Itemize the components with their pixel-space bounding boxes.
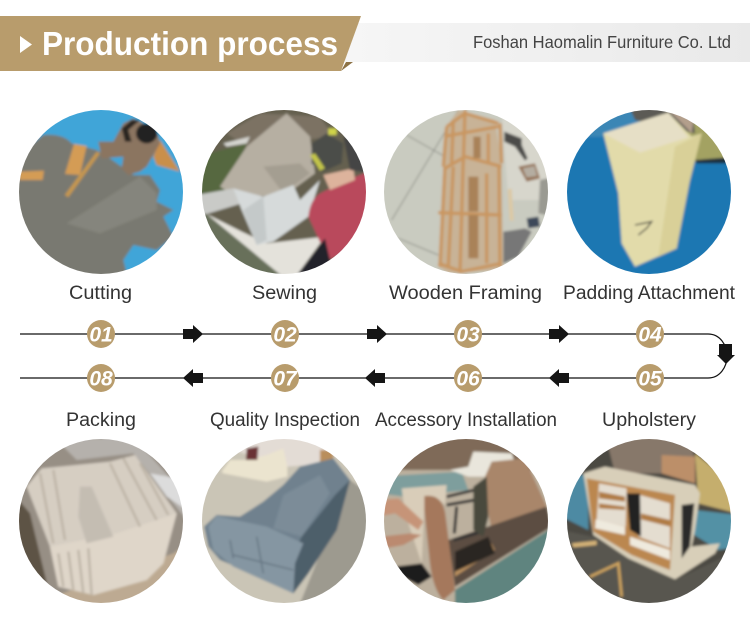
- badge 08: 08: [89, 368, 113, 390]
- badge 07: 07: [273, 368, 298, 390]
- label: wooden framing: Wooden Framing: [389, 283, 542, 304]
- icon: title arrow: [20, 36, 32, 53]
- company name: Foshan Haomalin Furniture Co. Ltd: [473, 32, 731, 52]
- photo: upholstery: [567, 439, 731, 603]
- arrow 1: [183, 325, 203, 343]
- header band: [0, 16, 750, 71]
- photo: padding attachment: [567, 110, 731, 274]
- photo: packing: [19, 439, 183, 603]
- badge 02: [271, 320, 299, 348]
- grey company band: [345, 23, 750, 62]
- badge 08: [87, 364, 115, 392]
- label: quality inspection: Quality Inspection: [210, 410, 360, 431]
- badge 01: 01: [89, 324, 113, 346]
- badge 06: 06: [456, 368, 480, 390]
- badge 04: [636, 320, 664, 348]
- flow lines: [20, 334, 727, 378]
- arrow 6: [365, 369, 385, 387]
- label: accessory installation: Accessory Installation: [375, 410, 557, 431]
- badge 03: 03: [456, 324, 480, 346]
- photo: quality inspection: [202, 439, 366, 603]
- title: Production process: [42, 25, 338, 62]
- photo: wooden framing: [384, 110, 548, 274]
- gold title ribbon: [0, 16, 361, 71]
- badge 06: [454, 364, 482, 392]
- ribbon fold: [341, 62, 353, 71]
- badge 05: 05: [638, 368, 662, 390]
- arrow 7: [183, 369, 203, 387]
- badge 03: [454, 320, 482, 348]
- badge 02: 02: [273, 324, 297, 346]
- label: cutting: Cutting: [69, 283, 132, 304]
- photo: sewing: [202, 110, 366, 274]
- badge 05: [636, 364, 664, 392]
- arrow 5: [549, 369, 569, 387]
- label: upholstery: Upholstery: [602, 410, 697, 431]
- badge 04: 04: [638, 324, 662, 346]
- timeline: [20, 320, 735, 392]
- badge 01: [87, 320, 115, 348]
- arrow 4 down: [717, 344, 735, 364]
- step labels: [66, 283, 736, 431]
- label: sewing: Sewing: [252, 283, 317, 304]
- label: padding attachment: Padding Attachment: [563, 283, 736, 304]
- label: packing: Packing: [66, 410, 136, 431]
- arrow 3: [549, 325, 569, 343]
- arrow 2: [367, 325, 387, 343]
- badge 07: [271, 364, 299, 392]
- photo: cutting: [19, 110, 183, 274]
- photo: accessory installation: [384, 439, 548, 603]
